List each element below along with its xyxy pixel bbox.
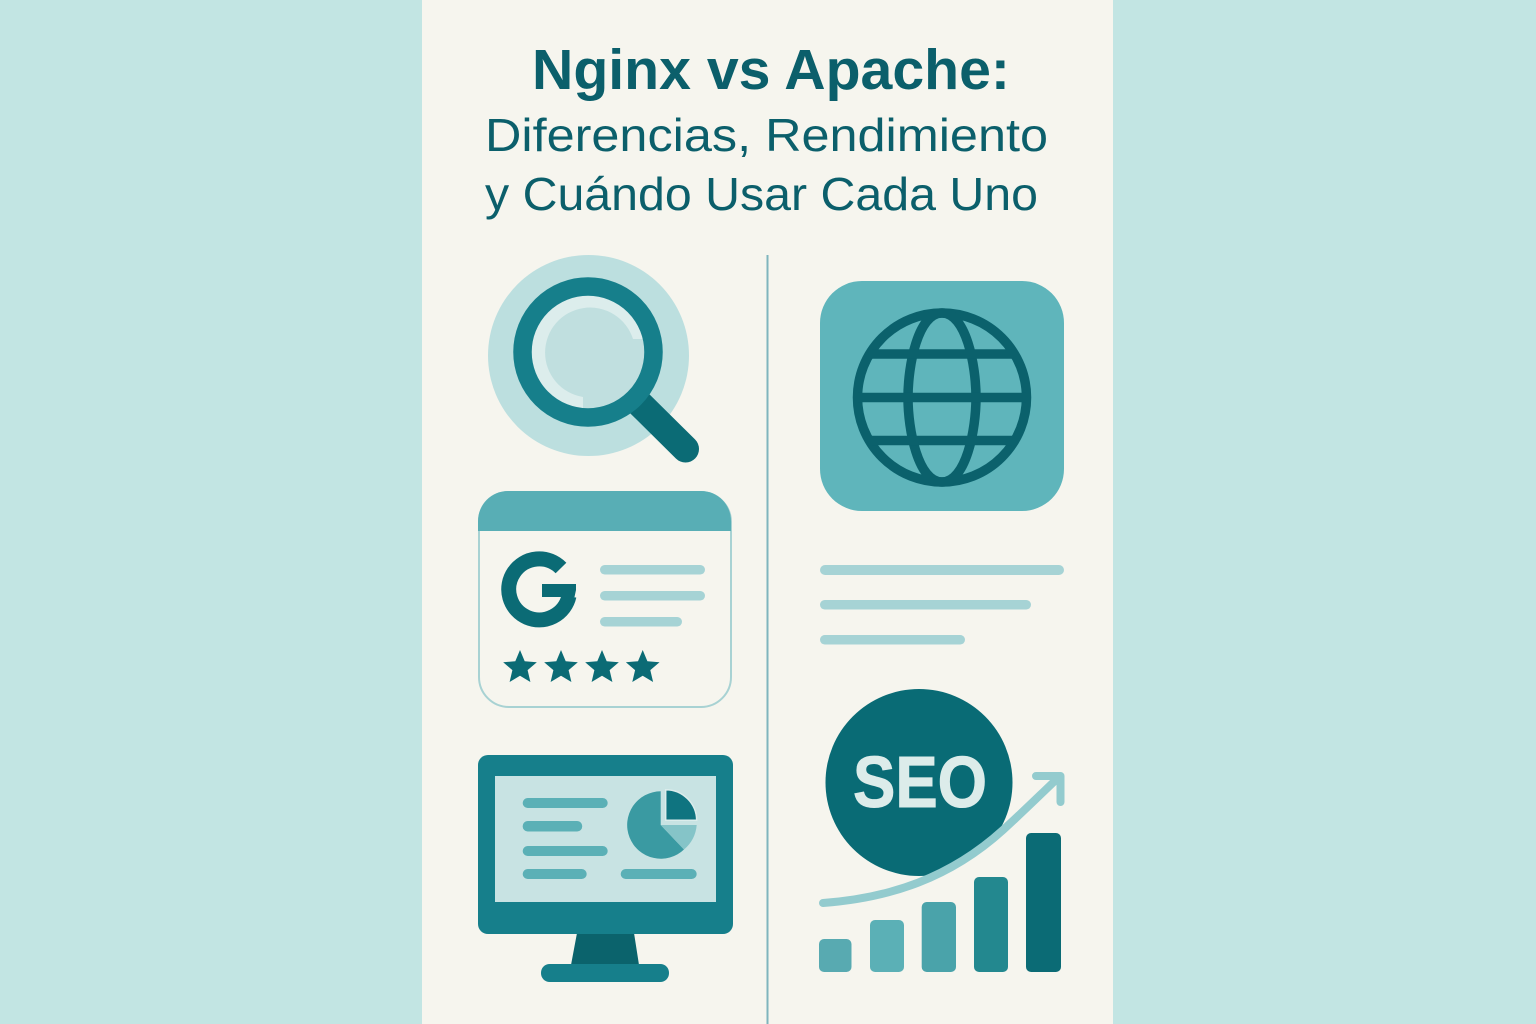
pie chart <box>627 790 697 859</box>
icon: desktop monitor <box>478 755 733 982</box>
icon: letter G <box>509 559 576 620</box>
title: Diferencias, Rendimiento <box>485 109 1048 161</box>
growth arrow <box>823 776 1060 903</box>
SEO badge: SEO <box>853 743 987 823</box>
center divider <box>766 255 768 1024</box>
bar chart <box>819 833 1061 972</box>
result text lines <box>600 565 705 626</box>
monitor body <box>478 755 733 934</box>
icon: magnifying glass <box>488 255 689 456</box>
monitor screen <box>495 776 716 902</box>
title: Nginx vs Apache: <box>532 38 1010 102</box>
icon: globe tile <box>820 281 1064 511</box>
title <box>485 38 1048 220</box>
monitor base <box>541 964 669 982</box>
panel: search result card <box>478 491 731 707</box>
monitor stand <box>571 933 639 965</box>
title: y Cuándo Usar Cada Uno <box>485 168 1038 220</box>
globe <box>858 313 1026 482</box>
star rating <box>503 650 660 682</box>
screen text lines <box>523 798 697 879</box>
SEO badge <box>826 689 1012 876</box>
text lines <box>820 565 1064 644</box>
center panel <box>422 0 1113 1024</box>
card header <box>478 491 731 531</box>
